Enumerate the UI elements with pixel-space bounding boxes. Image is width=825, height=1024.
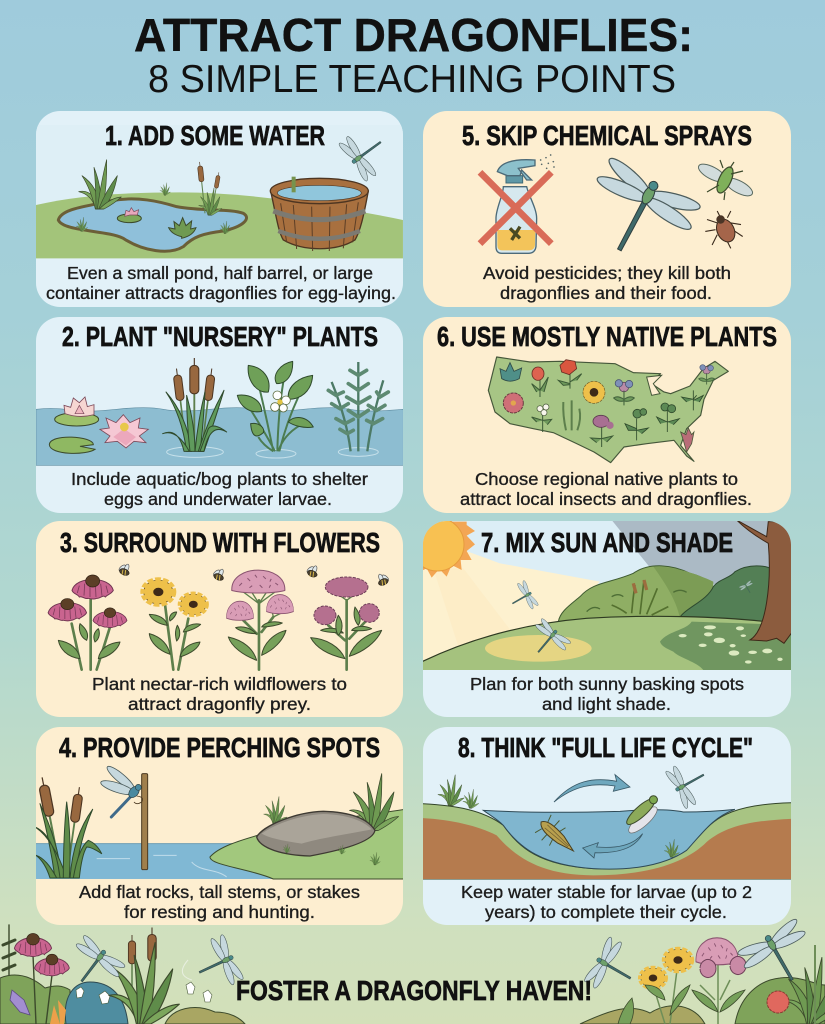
illustration: aquatic plants: [36, 358, 403, 465]
caption: eggs and underwater larvae.: [104, 489, 332, 509]
caption: and light shade.: [542, 694, 671, 714]
caption: [460, 469, 752, 509]
icon: brown beetle: [705, 211, 743, 248]
panel: 8 full life cycle: [420, 727, 795, 925]
caption: years) to complete their cycle.: [485, 902, 727, 922]
panel: 4 perching spots: [30, 727, 410, 925]
caption: [483, 263, 731, 303]
footer slogan: FOSTER A DRAGONFLY HAVEN!: [236, 975, 592, 1006]
caption: [71, 469, 368, 509]
caption: Avoid pesticides; they kill both: [483, 263, 731, 283]
panel: 5 skip chemical sprays: [423, 111, 791, 307]
caption: dragonflies and their food.: [500, 283, 712, 303]
panel: 3 surround with flowers: [36, 521, 403, 717]
panel: 2 nursery plants: [36, 317, 403, 513]
illustration: pond cross-section with life cycle: [420, 755, 795, 879]
caption: [79, 882, 360, 922]
caption: container attracts dragonflies for egg-laying.: [46, 283, 396, 303]
heading: 7. MIX SUN AND SHADE: [481, 527, 733, 558]
heading: 2. PLANT "NURSERY" PLANTS: [62, 321, 378, 352]
illustration: stake, rock and cattails: [30, 764, 410, 879]
panel: 6 native plants: [423, 317, 791, 513]
caption: [461, 882, 752, 922]
caption: [46, 263, 396, 303]
footer: left garden border: [0, 925, 246, 1024]
caption: Plan for both sunny basking spots: [470, 674, 744, 694]
caption: Even a small pond, half barrel, or large: [67, 263, 373, 283]
heading: 1. ADD SOME WATER: [105, 120, 325, 151]
heading: 5. SKIP CHEMICAL SPRAYS: [462, 120, 752, 151]
illustration: wildflowers and bees: [48, 564, 390, 670]
caption: attract local insects and dragonflies.: [460, 489, 752, 509]
footer: right garden border: [580, 915, 825, 1024]
caption: Plant nectar-rich wildflowers to: [92, 674, 347, 694]
icon: dragonfly: [572, 152, 705, 275]
caption: for resting and hunting.: [124, 902, 315, 922]
icon: perched dragonfly: [99, 764, 143, 817]
caption: Add flat rocks, tall stems, or stakes: [79, 882, 360, 902]
caption: [470, 674, 744, 714]
title: 8 SIMPLE TEACHING POINTS: [148, 58, 676, 101]
panel: 1 add some water: [30, 111, 410, 307]
panel: 7 mix sun and shade: [411, 518, 795, 717]
illustration: sun, shade and hill: [411, 518, 795, 670]
heading: 4. PROVIDE PERCHING SPOTS: [59, 732, 380, 763]
caption: attract dragonfly prey.: [128, 694, 311, 714]
caption: Include aquatic/bog plants to shelter: [71, 469, 368, 489]
caption: [92, 674, 347, 714]
illustration: US map with regional plants: [488, 357, 728, 463]
heading: 3. SURROUND WITH FLOWERS: [60, 527, 380, 558]
icon: crossed-out spray bottle: [480, 154, 555, 253]
caption: Keep water stable for larvae (up to 2: [461, 882, 752, 902]
illustration: pond and half barrel: [30, 122, 410, 258]
title: [134, 9, 693, 101]
title: ATTRACT DRAGONFLIES:: [134, 9, 693, 61]
icon: green fly: [696, 160, 755, 200]
caption: Choose regional native plants to: [475, 469, 738, 489]
